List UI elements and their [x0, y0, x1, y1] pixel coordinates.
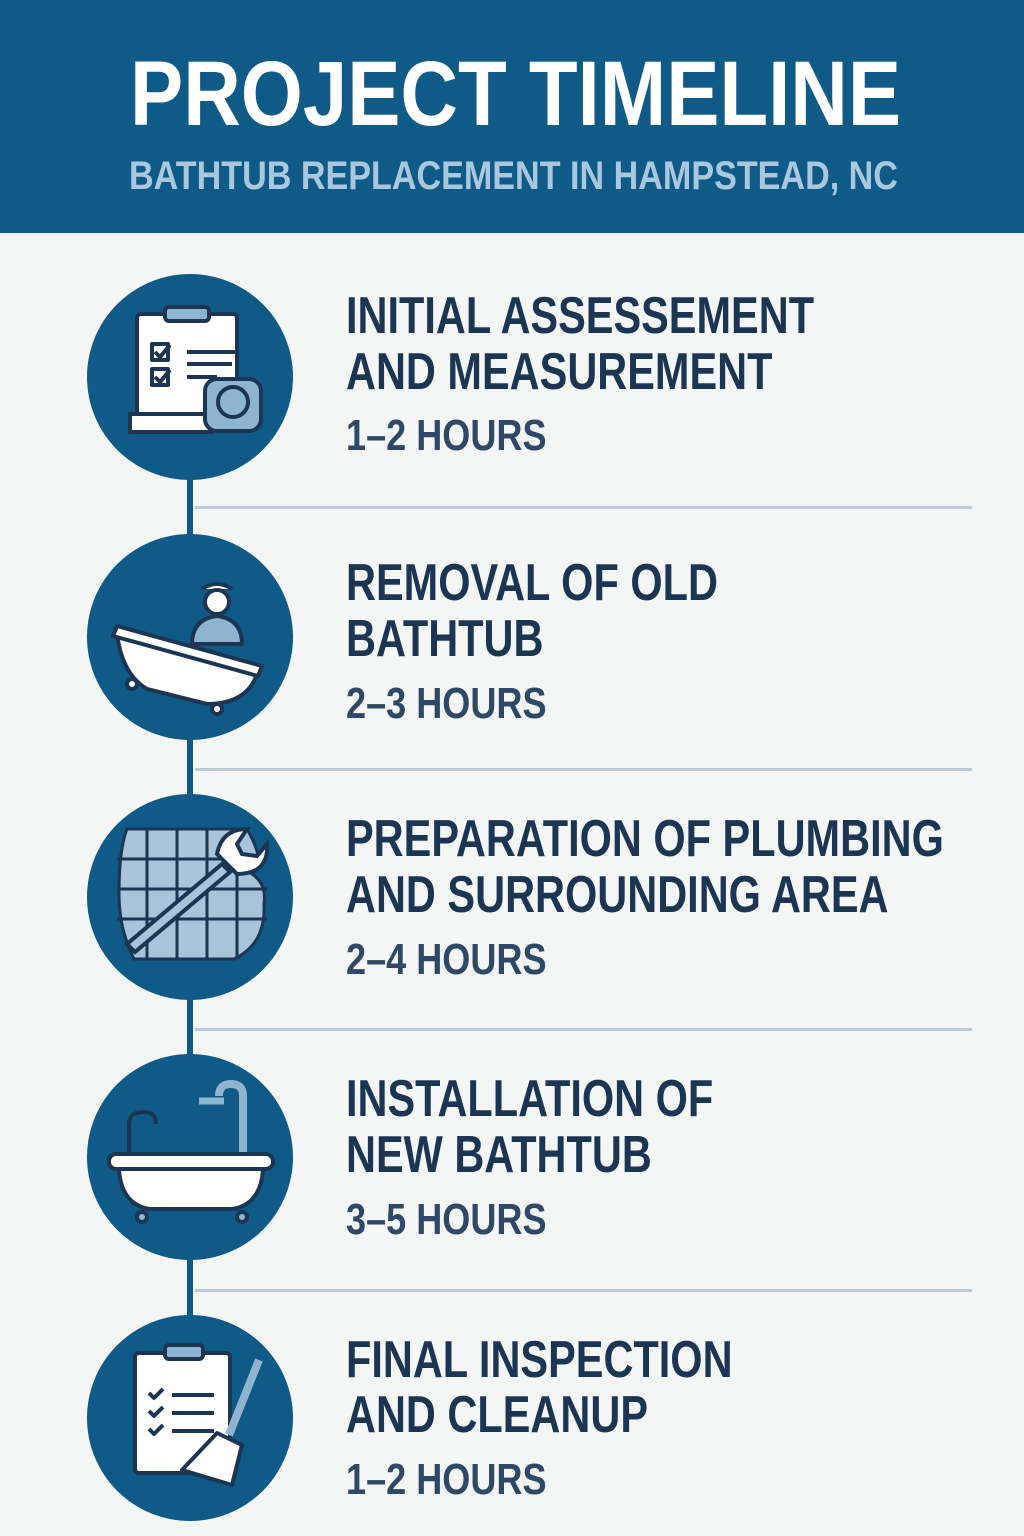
icon: worker removing bathtub: [87, 534, 293, 740]
text: AND CLEANUP: [346, 1386, 648, 1444]
step 2 text: REMOVAL OF OLD: [346, 554, 718, 612]
step 3 text: PREPARATION OF PLUMBING: [346, 810, 944, 868]
text: AND SURROUNDING AREA: [346, 866, 889, 924]
step 4 text: INSTALLATION OF: [346, 1070, 713, 1128]
text: AND MEASUREMENT: [346, 343, 772, 401]
text: 3–5 HOURS: [346, 1195, 547, 1244]
text: 2–3 HOURS: [346, 679, 547, 728]
text: 2–4 HOURS: [346, 935, 547, 984]
header: [0, 0, 1024, 233]
icon: new bathtub: [87, 1054, 293, 1260]
icon: tiles and wrench: [87, 794, 293, 1000]
text: NEW BATHTUB: [346, 1126, 652, 1184]
title: PROJECT TIMELINE: [130, 43, 901, 145]
text: BATHTUB: [346, 610, 543, 668]
step 5 text: FINAL INSPECTION: [346, 1331, 733, 1389]
step 1 text: INITIAL ASSESSEMENT: [346, 287, 814, 345]
timeline connector: [187, 470, 193, 1330]
subtitle: BATHTUB REPLACEMENT IN HAMPSTEAD, NC: [129, 154, 898, 198]
text: 1–2 HOURS: [346, 1455, 547, 1504]
text: 1–2 HOURS: [346, 411, 547, 460]
icon: clipboard and tape measure: [87, 274, 293, 480]
icon: checklist and broom: [87, 1315, 293, 1521]
